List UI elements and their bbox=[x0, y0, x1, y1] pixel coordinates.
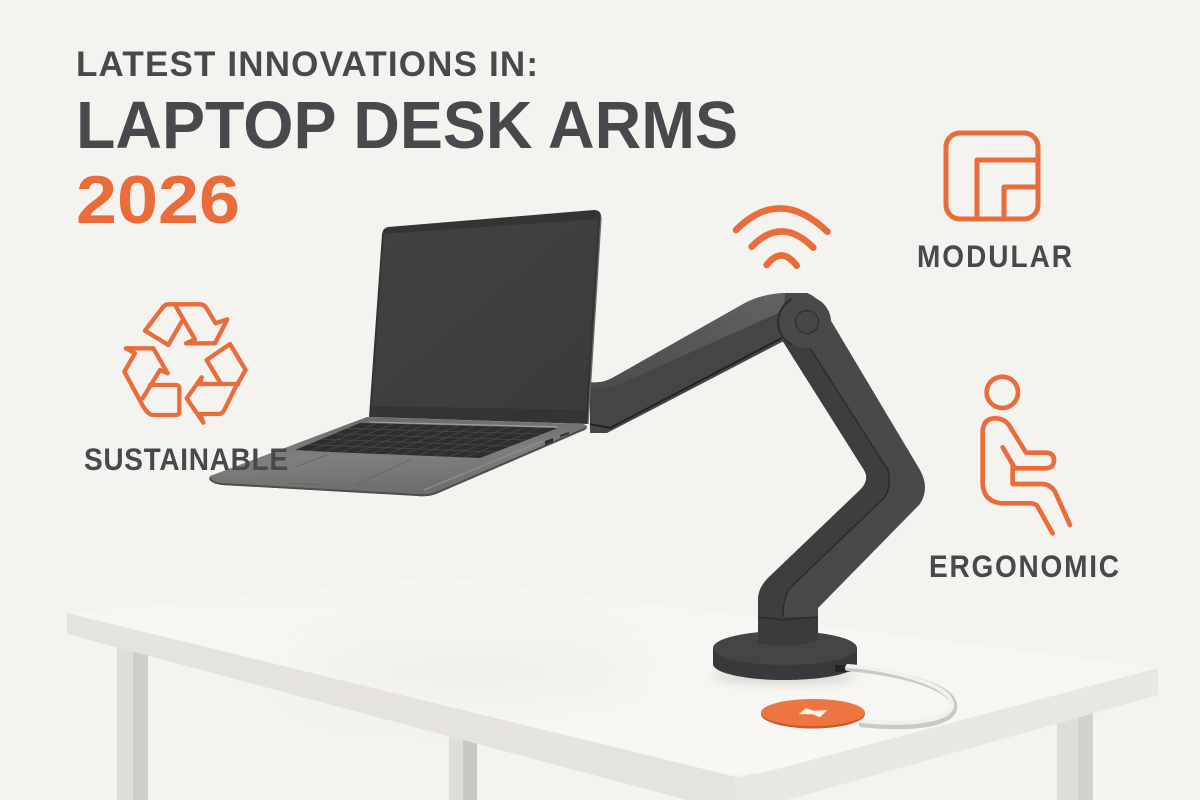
icon: modular grid bbox=[946, 133, 1038, 219]
round base bbox=[713, 631, 857, 680]
lid rim bbox=[588, 217, 601, 424]
overline: LATEST INNOVATIONS IN: bbox=[76, 45, 538, 84]
icon: lightning bolt bbox=[799, 708, 827, 717]
keyboard bbox=[295, 423, 558, 458]
wireless charging pad bbox=[761, 699, 865, 728]
icon: recycle bbox=[124, 304, 246, 423]
icon: seated person bbox=[983, 377, 1070, 533]
hinge strip bbox=[370, 422, 558, 427]
ports bbox=[545, 432, 569, 445]
title block bbox=[76, 45, 738, 238]
desk leg: front middle bbox=[449, 725, 477, 800]
feature: modular bbox=[917, 133, 1072, 274]
desk leg: back left bbox=[117, 640, 148, 800]
desk top surface bbox=[67, 577, 1158, 774]
desk bbox=[67, 577, 1158, 800]
soft shadow on desk bbox=[300, 650, 640, 694]
desk leg: right bbox=[1057, 705, 1093, 800]
year: 2026 bbox=[76, 162, 240, 238]
upper arm bbox=[590, 293, 806, 433]
trackpad lines bbox=[287, 455, 410, 485]
label: SUSTAINABLE bbox=[84, 443, 288, 477]
main heading: LAPTOP DESK ARMS bbox=[76, 88, 738, 163]
base shadow bbox=[713, 670, 857, 684]
desk front edge left bbox=[67, 613, 740, 800]
forearm bbox=[758, 293, 925, 646]
feature: sustainable bbox=[84, 304, 288, 477]
front edge highlight bbox=[424, 441, 543, 490]
laptop bbox=[209, 210, 601, 496]
charging cable bbox=[848, 666, 954, 726]
laptop deck front edge bbox=[210, 428, 586, 495]
desk front edge right bbox=[735, 668, 1158, 800]
monitor arm bbox=[590, 293, 925, 684]
laptop screen bbox=[372, 219, 598, 410]
icon: wifi bbox=[736, 208, 827, 266]
label: MODULAR bbox=[917, 240, 1072, 274]
feature: ergonomic bbox=[929, 377, 1119, 584]
elbow joint bbox=[778, 296, 831, 348]
laptop deck bbox=[209, 417, 587, 496]
label: ERGONOMIC bbox=[929, 550, 1119, 584]
laptop lid bbox=[369, 210, 601, 424]
